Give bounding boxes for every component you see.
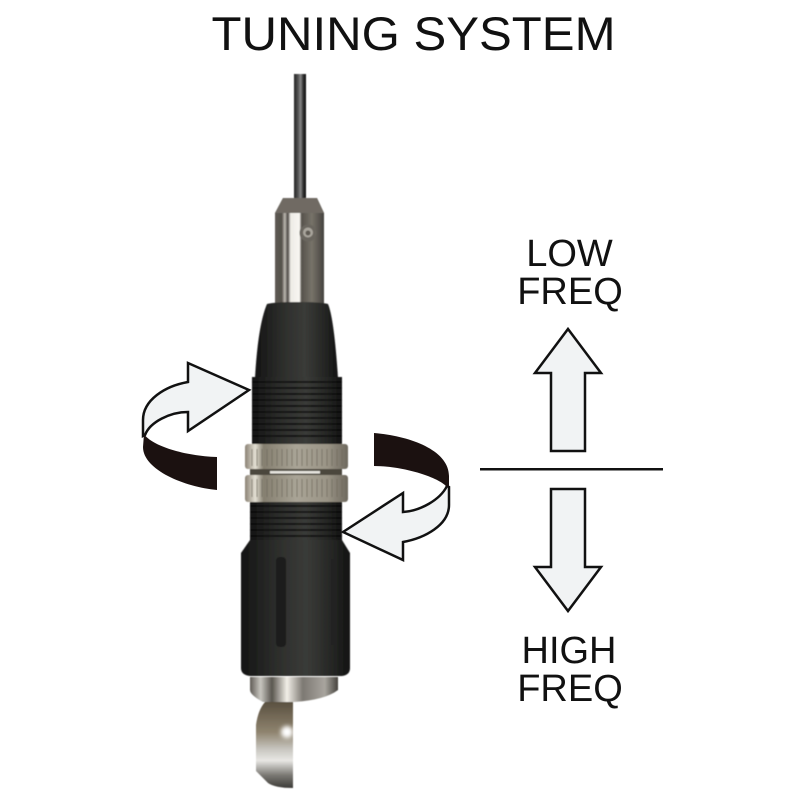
arrow dark back [374,433,449,487]
high freq label: HIGH [522,630,616,672]
arrow dark back [143,434,217,490]
low freq label [517,233,623,313]
arrow white face [143,363,249,436]
hook bracket [256,702,293,788]
upper ribbed section [252,377,342,444]
arrow white face [343,486,449,560]
antenna photo [241,74,350,788]
left rotation arrow [143,363,249,490]
bracket highlight [281,726,293,738]
black cone [255,302,338,378]
chrome tip [275,198,324,304]
metal base [250,677,338,702]
lower ribbed section [250,500,342,542]
whip rod [294,74,306,200]
high freq label [517,630,623,710]
down arrow [535,489,601,611]
right rotation arrow [343,433,449,560]
low freq label: LOW [526,233,613,275]
low freq label: FREQ [517,271,623,313]
up arrow [535,329,601,451]
high freq label: FREQ [517,668,623,710]
title: TUNING SYSTEM [212,7,616,60]
grip sleeve [241,540,350,676]
knurled ring [245,444,348,502]
divider line [480,468,663,470]
